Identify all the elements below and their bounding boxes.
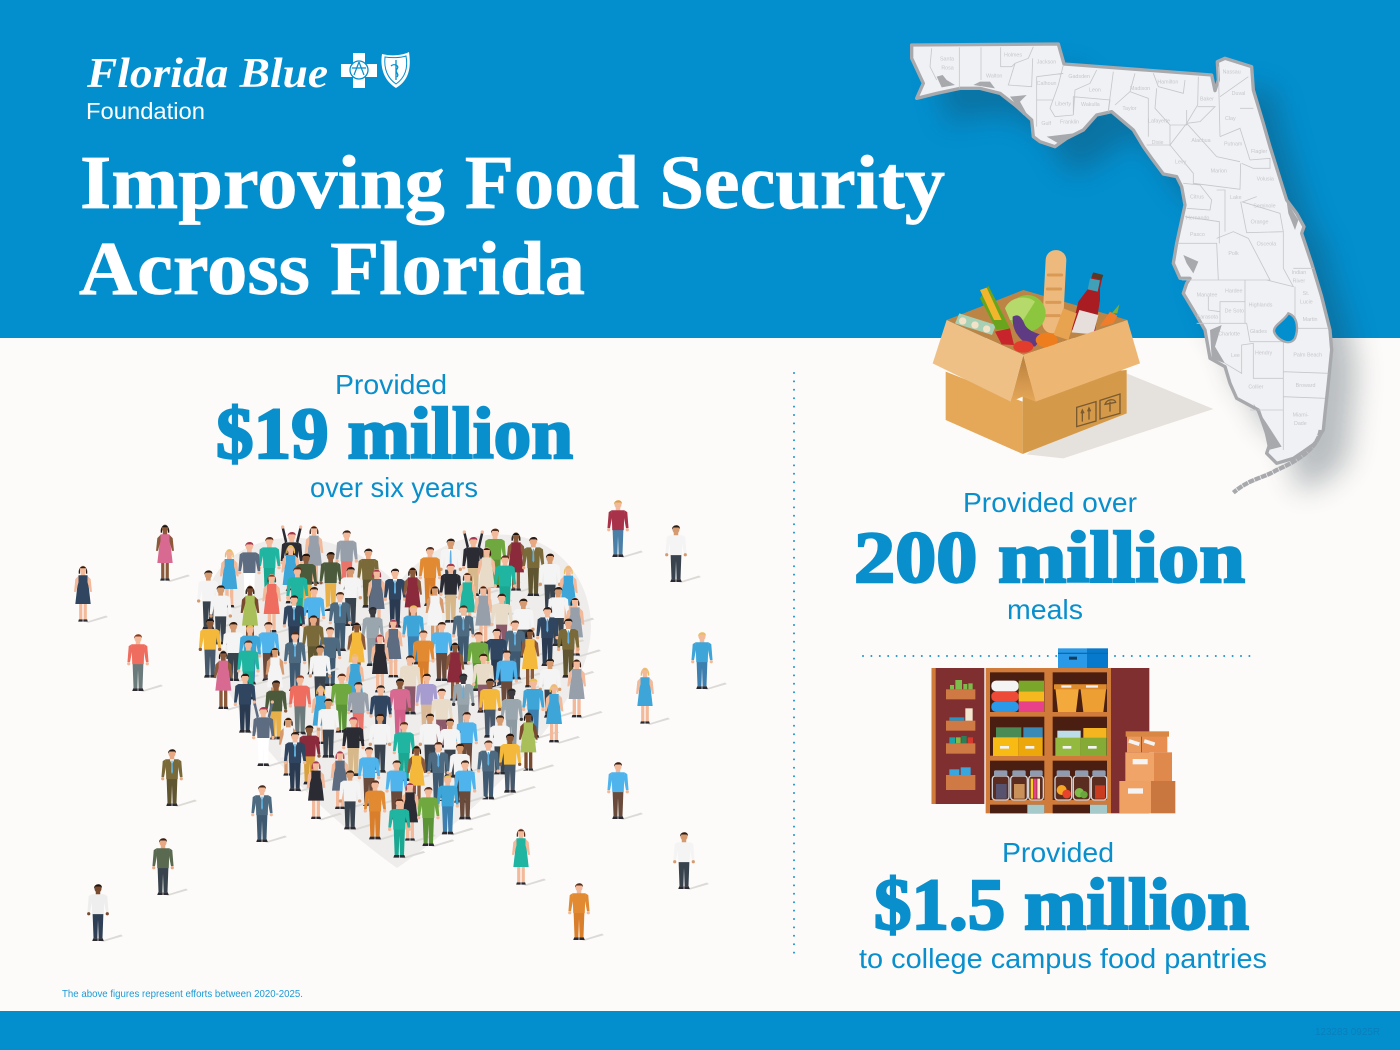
county labels: Taylor [1122, 106, 1137, 112]
county labels: Lake [1230, 195, 1242, 201]
county labels: Orange [1251, 220, 1268, 226]
stat: 1.5 million: $1.5 million [874, 864, 1249, 945]
county labels: Liberty [1055, 102, 1071, 108]
yellow bins with bottles [993, 727, 1043, 756]
county labels: Alachua [1191, 138, 1211, 144]
blue box on top [1058, 648, 1108, 668]
county labels: Miami- [1293, 412, 1309, 418]
county lines [930, 47, 1328, 450]
county labels: Manatee [1197, 293, 1217, 299]
map shadow [937, 71, 1357, 490]
stat: 1.5 million: Provided [1002, 837, 1114, 868]
bottle [1072, 272, 1103, 334]
county labels: Gadsden [1068, 74, 1090, 80]
county labels: Lucie [1300, 300, 1313, 306]
stat: 1.5 million: to college campus food pantries [859, 943, 1267, 974]
pantry illustration [932, 648, 1175, 813]
county labels: Gulf [1041, 121, 1052, 127]
stat: 200 million meals [854, 487, 1245, 625]
state outline [912, 44, 1332, 463]
county labels: Franklin [1060, 119, 1079, 125]
orange [1036, 333, 1058, 347]
county labels: Charlotte [1218, 331, 1240, 337]
page background [0, 338, 1400, 1011]
icon: blue shield [381, 52, 410, 88]
county labels: Osceola [1257, 241, 1276, 247]
county labels: Lee [1231, 353, 1240, 359]
box fold [1011, 355, 1036, 402]
county labels: Dade [1294, 421, 1307, 427]
county labels: Duval [1232, 91, 1245, 97]
lake okeechobee [1274, 313, 1297, 342]
county labels: Sarasota [1197, 315, 1218, 321]
stat: 19 million: $19 million [216, 393, 573, 474]
egg carton [955, 313, 996, 335]
county labels: Walton [986, 73, 1002, 79]
door bins [950, 680, 973, 689]
green bins with packages [1055, 728, 1107, 756]
stacked cardboard boxes [1119, 731, 1175, 813]
crowd of people in heart shape [197, 525, 603, 859]
eggplant [1013, 315, 1043, 347]
county labels: Hamilton [1157, 79, 1178, 85]
scattered people around heart [74, 500, 727, 942]
county labels: Volusia [1257, 176, 1274, 182]
county labels [940, 53, 1322, 427]
county labels: Seminole [1253, 203, 1276, 209]
stat: 19 million: Provided [335, 369, 447, 400]
county labels: Dixie [1152, 140, 1164, 146]
horizontal dotted divider [863, 655, 1253, 657]
county labels: Flagler [1251, 149, 1268, 155]
county labels: Nassau [1223, 69, 1241, 75]
icons: handling marks [1077, 394, 1120, 427]
county labels: Lafayette [1148, 119, 1170, 125]
county labels: Indian [1292, 270, 1306, 276]
county labels: Rosa [941, 65, 954, 71]
heart shadow [205, 534, 591, 868]
county labels: Broward [1296, 383, 1316, 389]
county labels: Hernando [1186, 216, 1209, 222]
corn [980, 286, 1010, 330]
county labels: River [1293, 279, 1305, 285]
cabinet frame [986, 668, 1111, 813]
title [79, 141, 945, 311]
bread slice [1053, 308, 1077, 340]
county labels: Clay [1225, 116, 1236, 122]
county labels: Calhoun [1037, 81, 1057, 87]
county labels: Marion [1211, 169, 1227, 175]
tomato [1013, 341, 1033, 353]
map of Florida [912, 44, 1357, 493]
title: Across Florida [79, 227, 585, 311]
county labels: St. [1303, 291, 1309, 297]
footnote: The above figures represent efforts between 2020-2025. [62, 988, 303, 1000]
bay and coast details [937, 75, 1298, 450]
county labels: Hendry [1255, 351, 1273, 357]
vertical dotted divider [793, 373, 795, 956]
footer band [0, 1011, 1400, 1050]
left door [932, 668, 984, 804]
county labels: Polk [1228, 251, 1239, 257]
county labels: De Soto [1225, 309, 1244, 315]
county labels: Pasco [1190, 232, 1205, 238]
box inner back [947, 290, 1127, 355]
stat: 19 million [216, 369, 573, 503]
box right face [1023, 370, 1127, 454]
lettuce [1005, 295, 1046, 332]
stat: 200 million meals: meals [1007, 594, 1083, 625]
box shadow [1027, 373, 1213, 458]
county labels: Holmes [1004, 53, 1022, 59]
county labels: Levy [1175, 160, 1187, 166]
glass jars [992, 776, 1107, 800]
right flap [1023, 320, 1140, 402]
florida keys [1233, 430, 1321, 493]
food box [933, 250, 1213, 458]
box left face [946, 372, 1023, 454]
county labels: Wakulla [1081, 102, 1100, 108]
county labels: Citrus [1190, 195, 1204, 201]
county labels: Baker [1200, 97, 1214, 103]
county labels: Hardee [1225, 289, 1243, 295]
right door [1111, 668, 1149, 813]
baguette [1042, 250, 1067, 334]
county labels: Madison [1130, 86, 1150, 92]
document code: 123283 0925R [1315, 1026, 1380, 1038]
county labels: Glades [1250, 329, 1267, 335]
county labels: Collier [1248, 385, 1264, 391]
stat: 200 million meals: 200 million [854, 517, 1245, 598]
county labels: Santa [940, 57, 954, 63]
county labels: Highlands [1249, 303, 1273, 309]
header band [0, 0, 1400, 338]
left flap [933, 320, 1023, 402]
title: Improving Food Security [80, 141, 945, 225]
county labels: Jackson [1037, 59, 1056, 65]
cabinet compartments [990, 672, 1107, 813]
carrot [1099, 312, 1117, 327]
pepper [995, 328, 1014, 345]
icon: blue cross [341, 53, 377, 88]
logo: Florida Blue Foundation: Foundation [86, 98, 205, 124]
county labels: Putnam [1224, 141, 1243, 147]
stat: 1.5 million [859, 837, 1267, 974]
folded towels [991, 681, 1044, 712]
county labels: Leon [1089, 87, 1101, 93]
stat: 200 million meals: Provided over [963, 487, 1137, 518]
logo: Florida Blue Foundation: Florida Blue [86, 51, 328, 97]
logo: Florida Blue Foundation [86, 51, 410, 124]
stat: 19 million: over six years [310, 472, 478, 503]
county labels: Martin [1303, 317, 1318, 323]
county labels: Palm Beach [1293, 352, 1322, 358]
storage bins top right [1054, 684, 1107, 712]
